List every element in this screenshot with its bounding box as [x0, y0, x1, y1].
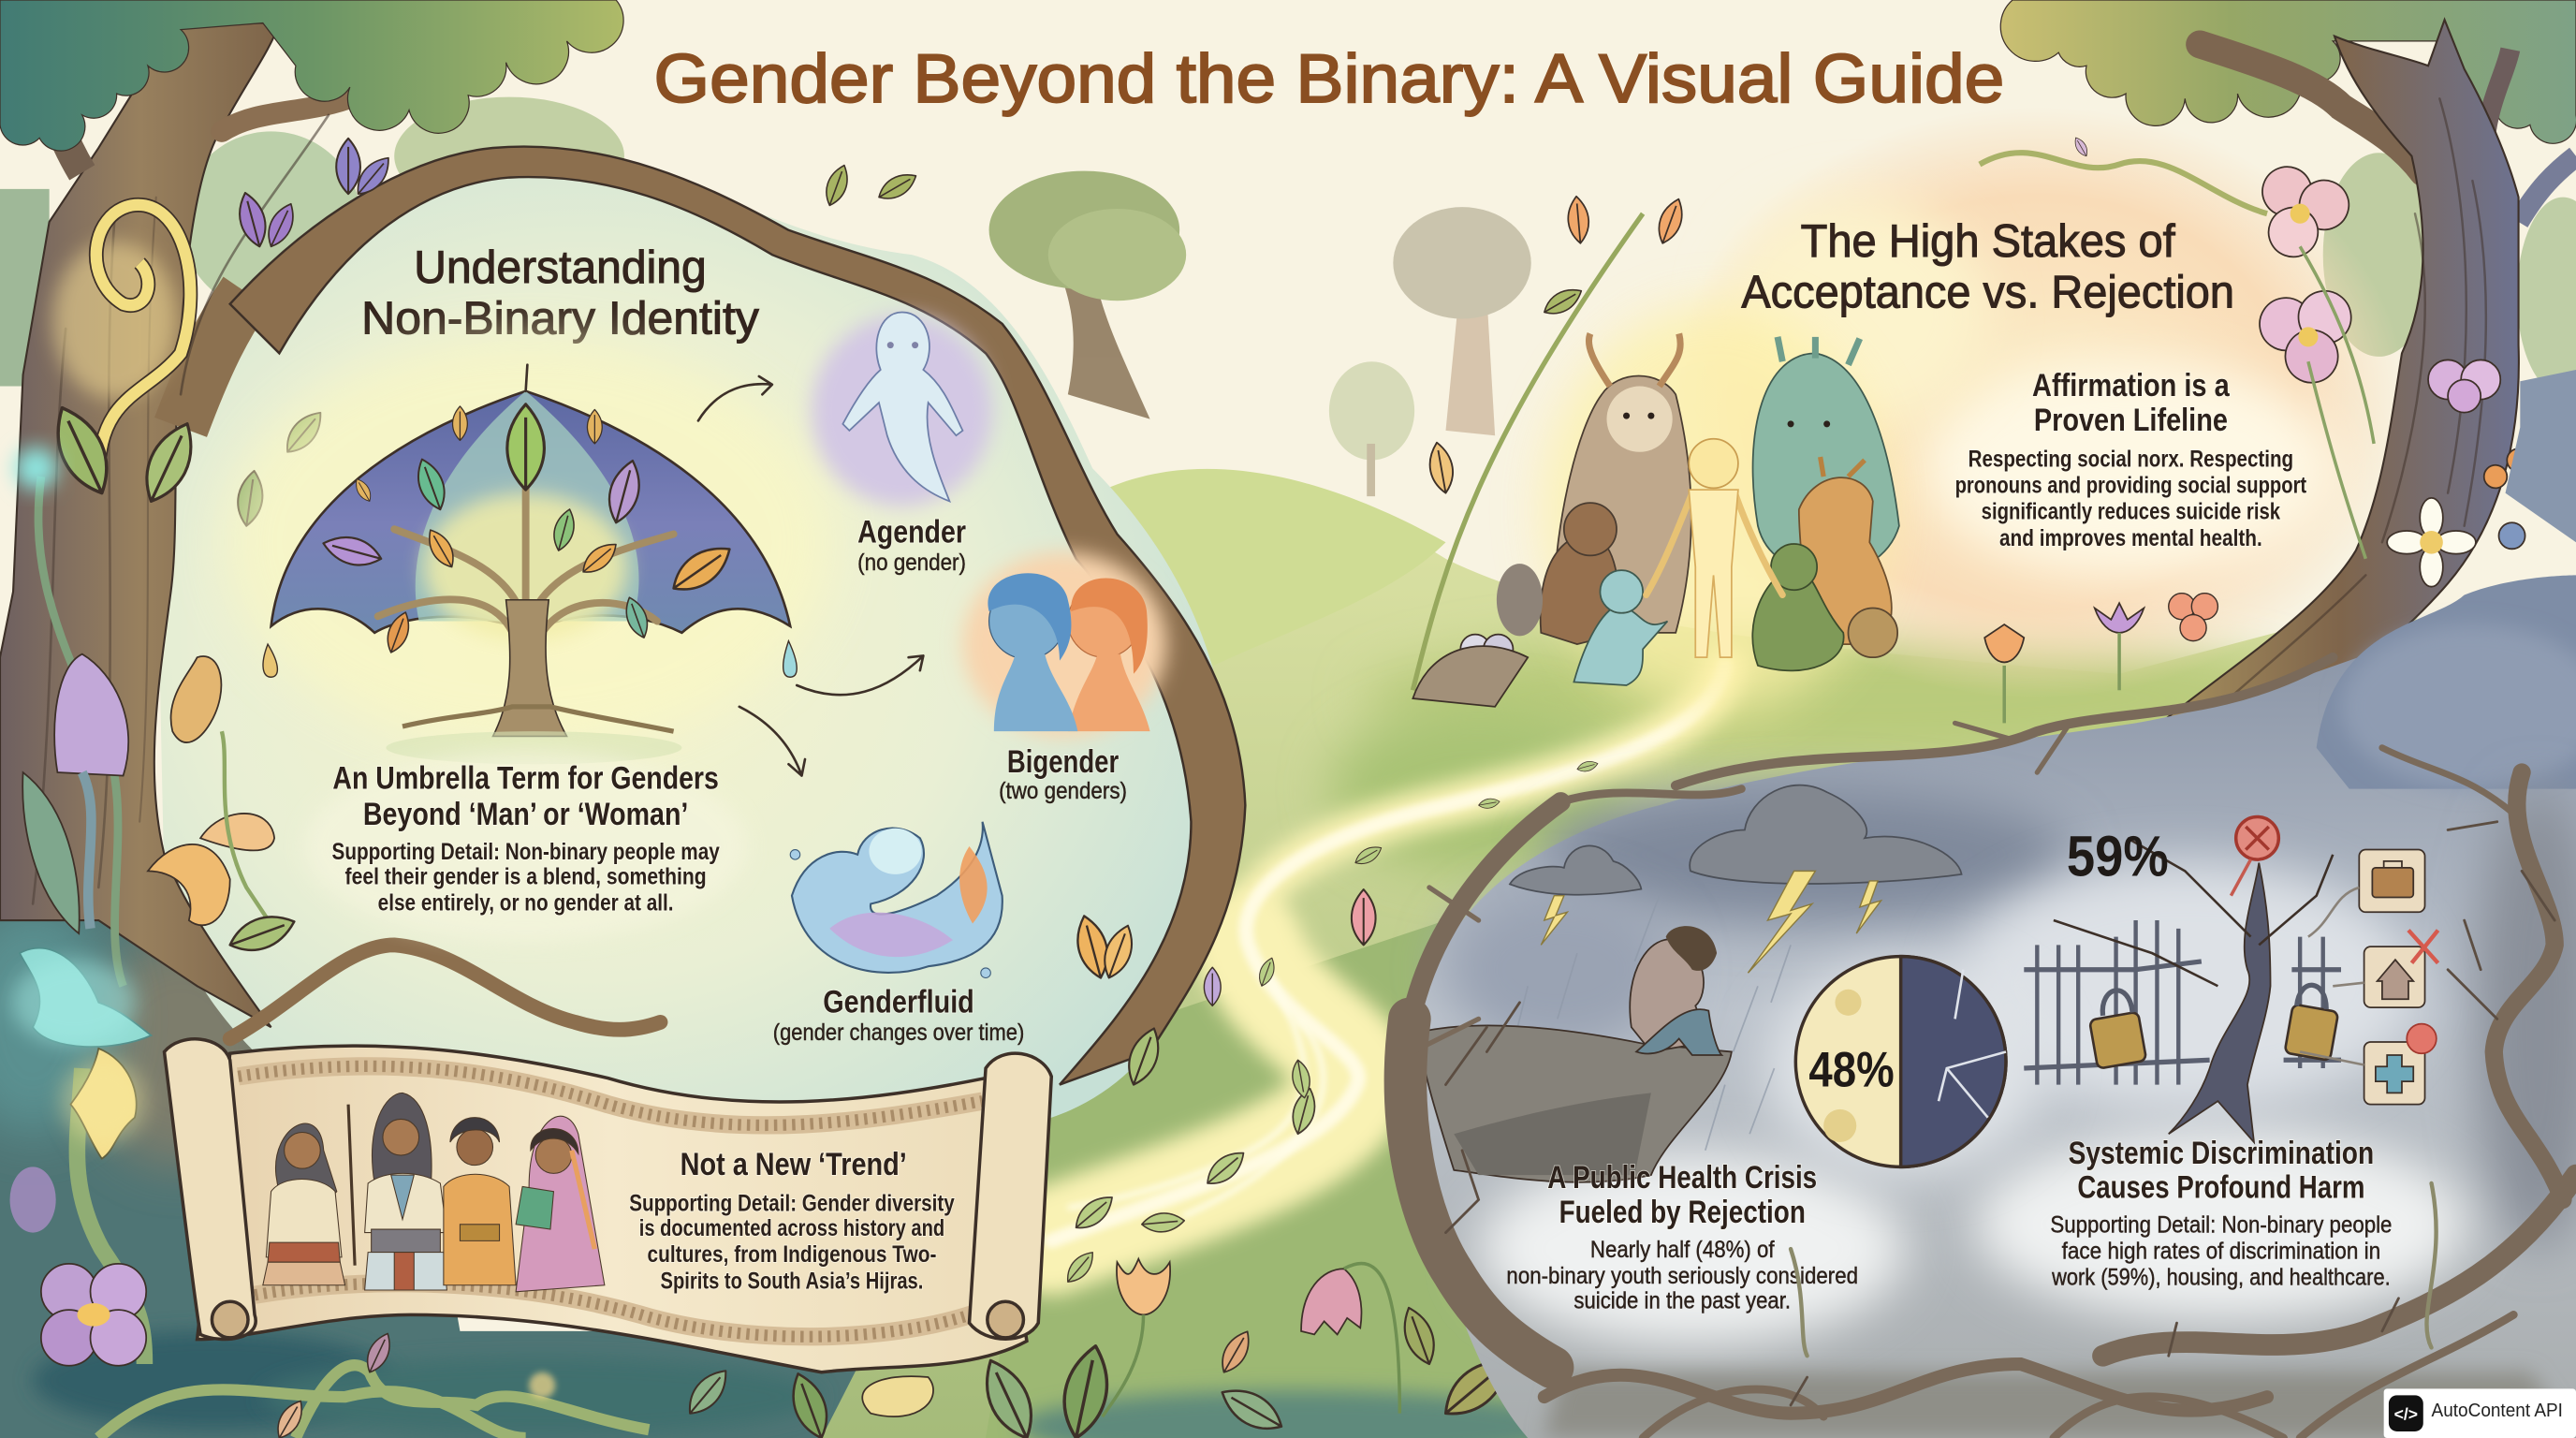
panel: rejection storm: [1412, 370, 2576, 1438]
text: public health crisis: suicide in the past year.: [1573, 1288, 1791, 1313]
illustration: person on cliff: [1419, 926, 1732, 1182]
text: systemic discrimination: Causes Profound Harm: [2077, 1170, 2364, 1206]
icon: housing: [2333, 931, 2438, 1007]
background: peach glow of acceptance: [1667, 107, 2407, 698]
text: not a new trend: [629, 1147, 955, 1294]
text: systemic discrimination: Systemic Discrimination: [2069, 1136, 2374, 1171]
badge: autocontent api: AutoContent API: [2432, 1401, 2563, 1421]
text: systemic discrimination: Supporting Detail: Non-binary people: [2050, 1213, 2392, 1239]
text: umbrella term: feel their gender is a blend, something: [345, 864, 707, 889]
person: [1630, 926, 1721, 1055]
heading: understanding non-binary identity: Understanding: [414, 242, 707, 293]
text: public health crisis: Fueled by Rejection: [1559, 1195, 1806, 1230]
text: affirmation: [1955, 368, 2306, 551]
text: affirmation: significantly reduces suicide risk: [1982, 500, 2280, 525]
right tree with roots: [2119, 20, 2576, 772]
text: umbrella term: [304, 751, 748, 942]
distant trees: [989, 171, 1531, 496]
creature: orange goat: [1799, 457, 1892, 644]
background: meadow and hills: [822, 469, 2432, 1438]
illustration: creatures surrounding glowing figure: [1497, 304, 1899, 715]
glowing path: [1051, 666, 1725, 1287]
creature: deer spirit: [1553, 333, 1691, 633]
scroll illustration: four historic figures: [263, 1093, 605, 1292]
padlocks: [2089, 985, 2338, 1069]
text: public health crisis: non-binary youth seriously considered: [1506, 1264, 1858, 1289]
icon: genderfluid: [790, 822, 1003, 977]
heading: high stakes: Acceptance vs. Rejection: [1741, 267, 2234, 317]
label: bigender: (two genders): [999, 779, 1127, 804]
text: not a new trend: Supporting Detail: Gender diversity: [629, 1192, 955, 1217]
title: Gender Beyond the Binary: A Visual Guide: [654, 39, 2004, 117]
creature: snail: [1848, 609, 1897, 657]
text: not a new trend: Not a New ‘Trend’: [681, 1147, 907, 1182]
text: public health crisis: [1506, 1160, 1858, 1313]
panel: scroll, not a new trend: [165, 1039, 1051, 1372]
text: umbrella term: An Umbrella Term for Genders: [332, 761, 719, 797]
left tree trunk and framing branches: [0, 23, 1245, 1085]
icon: umbrella tree: [225, 337, 833, 764]
text: umbrella term: else entirely, or no gender at all.: [378, 891, 674, 917]
left vines, glow spirals and flowers: [10, 139, 1116, 1438]
badge: autocontent api: [2384, 1388, 2576, 1438]
text: public health crisis: A Public Health Crisis: [1547, 1160, 1817, 1196]
text: not a new trend: is documented across history and: [639, 1216, 944, 1241]
figure: glowing person: [1647, 439, 1782, 657]
text: affirmation: and improves mental health.: [1999, 526, 2262, 551]
icon: agender: [812, 313, 992, 506]
text: systemic discrimination: [2050, 1136, 2392, 1291]
creature: teal monster: [1753, 337, 1899, 575]
label: bigender: Bigender: [1007, 744, 1119, 780]
icon: work briefcase: [2308, 850, 2425, 937]
illustration: locked fence and cracked tree: [2024, 816, 2438, 1142]
label: genderfluid: Genderfluid: [823, 984, 974, 1020]
text: public health crisis: Nearly half (48%) of: [1590, 1238, 1775, 1263]
creature: brown bear: [1497, 503, 1623, 644]
thorny trees framing storm: [1406, 657, 2576, 1438]
text: not a new trend: Spirits to South Asia’s Hijras.: [661, 1269, 923, 1294]
chart: 48% moon: [1795, 957, 2006, 1167]
icon: healthcare: [2300, 1024, 2437, 1105]
icon: no sign: [2231, 816, 2278, 896]
label: genderfluid: [773, 984, 1024, 1046]
heading: understanding non-binary identity: [361, 242, 759, 344]
badge: autocontent api: </>: [2394, 1405, 2418, 1424]
text: systemic discrimination: face high rates of discrimination in: [2062, 1240, 2380, 1265]
tree canopy: top right: [2000, 0, 2576, 143]
illustration: locked fence and cracked tree: 59%: [2067, 825, 2169, 889]
arrows from umbrella to identities: [698, 376, 923, 776]
text: umbrella term: Supporting Detail: Non-binary people may: [332, 840, 720, 865]
text: not a new trend: cultures, from Indigenous Two-: [648, 1242, 936, 1268]
cliff: [1419, 1025, 1732, 1182]
panel: understanding non-binary identity (background blob): [156, 156, 1229, 1118]
label: bigender: [999, 744, 1127, 804]
heading: high stakes: [1741, 216, 2234, 317]
wavy branch above the scroll: [230, 945, 661, 1038]
label: agender: Agender: [857, 514, 966, 550]
figure one: [263, 1123, 345, 1285]
label: genderfluid: (gender changes over time): [773, 1020, 1024, 1046]
figure two with spear: [348, 1093, 446, 1290]
text: umbrella term: Beyond ‘Man’ or ‘Woman’: [363, 797, 688, 832]
flowers: acceptance meadow: [1071, 136, 2530, 1438]
text: systemic discrimination: work (59%), housing, and healthcare.: [2051, 1266, 2391, 1291]
label: agender: [857, 514, 966, 576]
figure three: [444, 1118, 516, 1285]
tree canopy: top left: [0, 0, 623, 151]
heading: high stakes: The High Stakes of: [1801, 216, 2175, 267]
creature: blue baby: [1573, 570, 1667, 685]
icon: bigender: [962, 552, 1166, 736]
text: affirmation: pronouns and providing social support: [1955, 474, 2306, 499]
text: affirmation: Respecting social norx. Respecting: [1969, 448, 2293, 473]
creature: green friend: [1752, 544, 1844, 670]
storm clouds and lightning: [1510, 785, 1962, 1151]
chart: 48% moon: 48%: [1808, 1042, 1895, 1097]
heading: understanding non-binary identity: Non-Binary Identity: [361, 293, 759, 344]
figure four in sari: [516, 1116, 605, 1292]
text: affirmation: Proven Lifeline: [2034, 403, 2228, 438]
text: affirmation: Affirmation is a: [2032, 368, 2230, 404]
label: agender: (no gender): [857, 550, 966, 576]
